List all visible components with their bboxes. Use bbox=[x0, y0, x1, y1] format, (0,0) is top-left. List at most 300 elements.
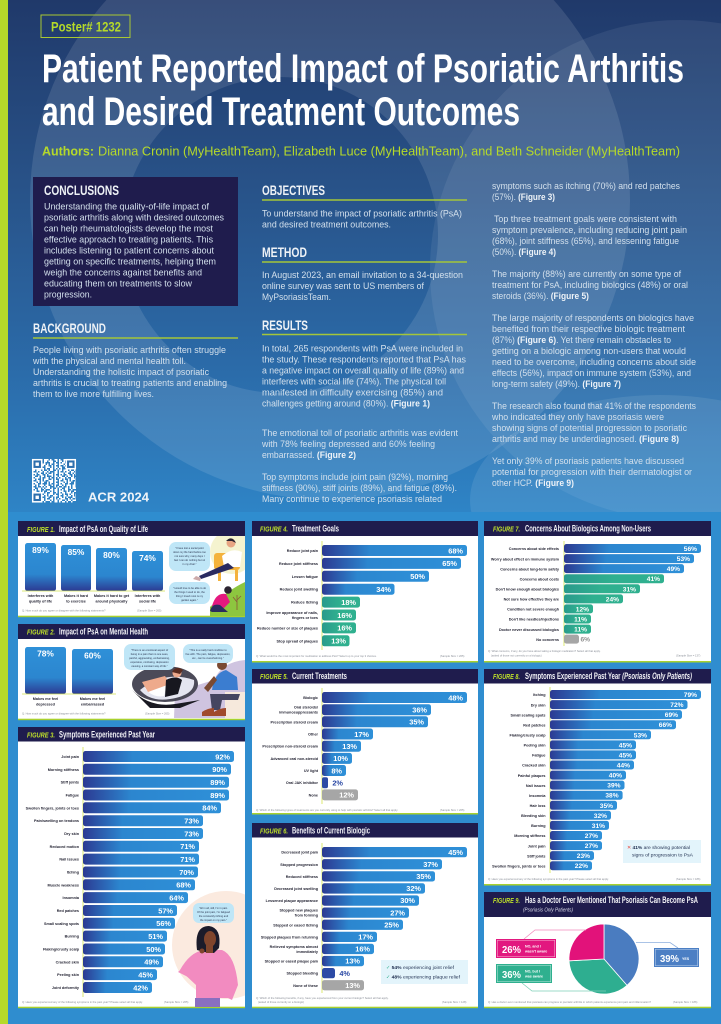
bar chart: psoriasis-only symptoms: Peeling skin bbox=[524, 744, 546, 748]
bar chart: biologic benefits: None of these bbox=[293, 984, 318, 988]
bar chart: symptoms past year: Dry skin bbox=[64, 832, 80, 836]
bar chart: psoriasis-only symptoms: 45% bbox=[619, 742, 632, 749]
bar chart: current treatments: 35% bbox=[409, 718, 424, 727]
footnote: Q: Has a doctor ever mentioned that psoriasis can progress to psoriatic arthritis in which patients experience joint pain and inflammation? bbox=[488, 1000, 651, 1004]
panel: figure 9: FIGURE 9. bbox=[493, 898, 520, 905]
bar chart: current treatments: 2% bbox=[332, 778, 343, 788]
panel: results, column two: treatment for PsA, including biologics (48%) or oral bbox=[492, 279, 688, 290]
bar chart: quality of life: around physically bbox=[96, 600, 128, 604]
footnote: (Sample Size = 186) bbox=[673, 1000, 698, 1004]
panel: results, column one: with 78% feeling depressed and 60% feeling bbox=[261, 438, 435, 449]
footnote: (Sample Size = 265) bbox=[440, 808, 465, 812]
bar chart: symptoms past year: Nail issues bbox=[59, 858, 79, 862]
bar chart: psoriasis-only symptoms: Insomnia bbox=[529, 794, 546, 798]
bar chart: psoriasis-only symptoms: 31% bbox=[592, 823, 605, 830]
footnote: (Sample Size = 265) bbox=[145, 712, 170, 716]
callout: patient quote two: "I would love to be able to do bbox=[173, 586, 207, 590]
callout: yes: 39% bbox=[660, 954, 679, 965]
bar chart: biologic benefits: 32% bbox=[406, 884, 421, 893]
bar chart: concerns about biologics: 56% bbox=[684, 546, 697, 553]
bar chart: biologic benefits: Stopped progression bbox=[280, 863, 319, 867]
callout: patient quote five bbox=[193, 903, 234, 923]
panel: background section: them to live more fulfilling lives. bbox=[33, 388, 154, 399]
bar chart: symptoms past year: 64% bbox=[169, 893, 184, 902]
bar chart: biologic benefits: 45% bbox=[448, 848, 463, 857]
callout: progression signs bbox=[623, 840, 701, 863]
callout: progression signs: ✕ 41% are showing potential bbox=[627, 845, 690, 851]
panel: results, column two: other HCP. (Figure 9) bbox=[492, 477, 574, 488]
panel: background section: BACKGROUND bbox=[33, 320, 106, 336]
panel: figure 1: FIGURE 1. bbox=[27, 527, 55, 534]
bar chart: treatment goals: Reduce joint pain bbox=[287, 549, 319, 553]
panel: figure 9: (Psoriasis Only Patients) bbox=[523, 908, 573, 914]
bar chart: psoriasis-only symptoms: Burning bbox=[531, 824, 546, 828]
panel: figure 9 bbox=[484, 892, 711, 1008]
panel: results, column one: Top symptoms include joint pain (92%), morning bbox=[262, 471, 448, 482]
bar chart: concerns about biologics: 24% bbox=[606, 596, 619, 603]
bar chart: treatment goals: Improve appearance of nails, bbox=[266, 611, 318, 615]
bar chart: psoriasis-only symptoms: 38% bbox=[605, 793, 619, 800]
bar chart: psoriasis-only symptoms: 45% bbox=[619, 752, 632, 759]
bar chart: psoriasis-only symptoms: Hair loss bbox=[530, 804, 546, 808]
bar chart: symptoms past year: Reduced motion bbox=[50, 845, 80, 849]
authors: Dianna Cronin (MyHealthTeam), Elizabeth Luce (MyHealthTeam), and Beth Schneider (MyHealthTeam) bbox=[98, 144, 680, 158]
callout: patient quote four: etc., can be overwhelming." bbox=[192, 656, 224, 660]
panel: figure 8 bbox=[484, 669, 711, 886]
panel: objectives: and desired treatment outcomes. bbox=[262, 219, 391, 230]
bar chart: quality of life: quality of life bbox=[29, 600, 52, 604]
footnote: Q: How much do you agree or disagree with the following statements? bbox=[22, 608, 106, 612]
bar chart: psoriasis-only symptoms: Dry skin bbox=[531, 703, 546, 707]
bar chart: biologic benefits: 25% bbox=[384, 920, 399, 929]
illustration: resting and gardening patients bbox=[193, 536, 245, 616]
panel: figure 8: Symptoms Experienced Past Year (Psoriasis Only Patients) bbox=[525, 671, 692, 681]
panel: figure 7: Concerns About Biologics Among Non-Users bbox=[525, 524, 651, 534]
bar chart: current treatments: 10% bbox=[333, 754, 348, 763]
bar chart: concerns about biologics: No concerns bbox=[536, 638, 559, 642]
bar chart: psoriasis-only symptoms: 53% bbox=[634, 732, 647, 739]
footnote bbox=[22, 1000, 189, 1004]
panel: figure 3 bbox=[18, 727, 245, 1008]
bar chart: psoriasis-only symptoms: Cracked skin bbox=[522, 764, 546, 768]
panel: results, column two: Top three treatment goals were consistent with bbox=[494, 213, 677, 224]
bar chart: symptoms past year: Pain/swelling on tendons bbox=[34, 819, 79, 823]
callout: patient quote four: live with. The pain, fatigue, depression, bbox=[186, 652, 231, 656]
bar chart: treatment goals: 34% bbox=[376, 585, 391, 594]
bar chart: biologic benefits: Decreased joint pain bbox=[281, 851, 319, 855]
bar chart: biologic benefits: 13% bbox=[345, 981, 360, 990]
bar chart: quality of life: Makes it hard bbox=[64, 594, 89, 598]
callout: no but was aware bbox=[496, 964, 606, 991]
bar chart: current treatments: 13% bbox=[342, 742, 357, 751]
bar chart: psoriasis-only symptoms: Small scaling spots bbox=[510, 713, 546, 717]
panel: conclusions: weigh the concerns against benefits and bbox=[43, 266, 202, 278]
bar chart: symptoms past year: Insomnia bbox=[63, 896, 80, 900]
callout: relief summary: ✓ 48% experiencing plaque relief bbox=[386, 974, 461, 980]
bar chart: psoriasis-only symptoms: Joint pain bbox=[528, 844, 546, 848]
bar chart: symptoms past year: 51% bbox=[148, 932, 163, 941]
bar chart: concerns about biologics: 49% bbox=[667, 566, 680, 573]
panel: conclusions bbox=[33, 177, 238, 306]
callout: patient quote one: in my chair." bbox=[182, 562, 197, 566]
bar chart: current treatments: Prescription steroid cream bbox=[270, 720, 319, 724]
bar chart: psoriasis-only symptoms: 69% bbox=[665, 712, 678, 719]
bar chart: symptoms past year: 90% bbox=[212, 765, 227, 774]
bar chart: biologic benefits: Decreased joint swelling bbox=[274, 887, 319, 891]
panel: figure 1: Impact of PsA on Quality of Life bbox=[59, 524, 148, 534]
bar chart: symptoms past year: 42% bbox=[133, 983, 148, 992]
panel: method: online survey was sent to US members of bbox=[262, 280, 424, 291]
callout: patient quote five: the impact on my pain." bbox=[200, 918, 227, 922]
bar chart: biologic benefits: 16% bbox=[355, 945, 370, 954]
callout: patient quote five: "All in all, still, I'm in pain. bbox=[199, 906, 228, 910]
panel: conclusions: getting on specific treatments, helping them bbox=[44, 256, 216, 266]
bar chart: symptoms past year: 57% bbox=[158, 906, 173, 915]
bar chart: quality of life: Makes it hard to get bbox=[94, 594, 130, 598]
panel: objectives bbox=[262, 182, 467, 230]
bar chart: quality of life: Interferes with bbox=[135, 594, 161, 598]
panel: figure 3: FIGURE 3. bbox=[27, 732, 55, 740]
panel: results, column two: benefited from their respective biologic treatment bbox=[492, 323, 685, 334]
conference label: ACR 2024 bbox=[88, 490, 150, 505]
bar chart: concerns about biologics: Condition not severe enough bbox=[507, 608, 560, 612]
bar chart: quality of life: 89% bbox=[32, 545, 49, 555]
panel: results, column two: (57%). (Figure 3) bbox=[492, 191, 555, 202]
panel: results, column one: The emotional toll of psoriatic arthritis was evident bbox=[262, 427, 458, 438]
bar chart: current treatments: Oral steroids/ bbox=[294, 706, 318, 710]
bar chart: current treatments bbox=[262, 688, 467, 804]
bar chart: symptoms past year: Flaking/crusty scalp bbox=[43, 948, 80, 952]
bar chart: concerns about biologics: 6% bbox=[580, 637, 590, 644]
bar chart: symptoms past year: 92% bbox=[215, 752, 230, 761]
panel: method: In August 2023, an email invitation to a 34-question bbox=[262, 269, 463, 280]
bar chart: psoriasis-only symptoms: Nail issues bbox=[526, 784, 546, 788]
bar chart: concerns about biologics: Don't know enough about biologics bbox=[496, 588, 559, 592]
bar chart: mental health: 78% bbox=[37, 648, 54, 658]
bar chart: treatment goals: Reduce number or size of plaques bbox=[257, 626, 318, 630]
panel: conclusions: Understanding the quality-of-life impact of bbox=[44, 200, 209, 212]
bar chart: concerns about biologics: Doctor never discussed biologics bbox=[499, 628, 559, 632]
bar chart: psoriasis-only symptoms: 22% bbox=[575, 863, 588, 870]
bar chart: psoriasis-only symptoms: Red patches bbox=[523, 723, 546, 727]
bar chart: psoriasis-only symptoms: Morning stiffness bbox=[514, 834, 546, 838]
bar chart: symptoms past year: 56% bbox=[156, 919, 171, 928]
bar chart: biologic benefits: Relieved symptoms almost bbox=[270, 945, 319, 949]
callout: no but was aware: NO, but I bbox=[525, 970, 540, 974]
bar chart: concerns about biologics: Concerns about costs bbox=[520, 577, 559, 581]
bar chart: biologic benefits: 27% bbox=[390, 908, 405, 917]
bar chart: concerns about biologics: 11% bbox=[574, 616, 587, 624]
footnote: (asked of those not currently on a biologic) bbox=[491, 654, 542, 658]
bar chart: biologic benefits: 17% bbox=[358, 932, 373, 942]
bar chart: concerns about biologics: 41% bbox=[647, 576, 660, 583]
bar chart: biologic benefits: from forming bbox=[295, 914, 319, 918]
bar chart: symptoms past year: 89% bbox=[210, 791, 225, 800]
bar chart: treatment goals: 16% bbox=[337, 624, 352, 633]
bar chart: current treatments: Oral JAK inhibitor bbox=[286, 781, 319, 785]
bar chart: psoriasis-only symptoms bbox=[492, 687, 701, 873]
bar chart: concerns about biologics: Not sure how effective they are bbox=[504, 598, 559, 602]
footnote: (asked of those currently on a biologic) bbox=[258, 1000, 304, 1004]
bar chart: symptoms past year: 89% bbox=[210, 778, 225, 787]
bar chart: psoriasis-only symptoms: Fatigue bbox=[532, 754, 546, 758]
bar chart: biologic benefits: Stopped bleeding bbox=[287, 972, 319, 976]
bar chart: concerns about biologics: Concerns about side effects bbox=[509, 547, 559, 551]
callout: relief summary: ✓ 54% experiencing joint relief bbox=[386, 965, 455, 971]
panel: background section bbox=[32, 320, 238, 399]
callout: patient quote one: down my life hard before too bbox=[173, 550, 206, 554]
bar chart: psoriasis-only symptoms: 40% bbox=[609, 773, 622, 780]
footnote bbox=[256, 808, 465, 812]
footnote: Q: How much do you agree or disagree with the following statements? bbox=[22, 712, 106, 716]
bar chart: symptoms past year: Swollen fingers, joints or toes bbox=[26, 806, 79, 810]
bar chart: psoriasis-only symptoms: Bleeding skin bbox=[521, 814, 546, 818]
bar chart: concerns about biologics: 53% bbox=[677, 556, 690, 563]
poster number badge: Poster# 1232 bbox=[51, 19, 121, 35]
panel: results, column two: arthritis and may be underdiagnosed. (Figure 8) bbox=[492, 433, 679, 444]
panel: results, column two: getting on a biologic among non-users that would bbox=[492, 345, 686, 356]
panel: results, column one: manifested in difficulty exercising (85%) and bbox=[262, 386, 443, 398]
bar chart: biologic benefits: Stopped or eased plaque pain bbox=[265, 960, 319, 964]
panel: figure 5 bbox=[252, 669, 478, 814]
panel: results, column two: The majority (88%) are currently on some type of bbox=[492, 268, 681, 279]
bar chart: quality of life: Interferes with bbox=[28, 594, 54, 598]
bar chart: psoriasis-only symptoms: 79% bbox=[684, 692, 697, 699]
footnote: (Sample Size = 265) bbox=[440, 654, 465, 658]
bar chart: current treatments: Biologic bbox=[303, 696, 318, 700]
bar chart: psoriasis-only symptoms: 27% bbox=[585, 843, 598, 850]
title: and Desired Treatment Outcomes bbox=[42, 90, 520, 134]
panel: results, column one: the study. These respondents reported that PsA has bbox=[262, 354, 466, 364]
panel: conclusions: psoriatic arthritis along with desired outcomes bbox=[44, 212, 224, 222]
footnote: (Sample Size = 265) bbox=[164, 1000, 189, 1004]
panel: results, column one: challenges getting around (80%). (Figure 1) bbox=[262, 398, 430, 408]
bar chart: current treatments: Advanced oral non-steroid bbox=[270, 757, 319, 761]
footnote: Q: Have you experienced any of the following symptoms in the past year? Please select all that apply. bbox=[488, 877, 609, 881]
bar chart: symptoms past year: Muscle weakness bbox=[48, 883, 79, 887]
callout: patient quote four: "This is a really hard condition to bbox=[189, 648, 227, 652]
panel: method bbox=[262, 244, 467, 302]
bar chart: current treatments: 8% bbox=[331, 766, 342, 775]
footnote: (Sample Size = 186) bbox=[676, 877, 701, 881]
bar chart: treatment goals: 16% bbox=[337, 611, 352, 620]
bar chart: symptoms past year: 73% bbox=[184, 829, 199, 838]
icon: QR code bbox=[32, 460, 76, 502]
bar chart: concerns about biologics: Concerns about long-term safety bbox=[500, 567, 560, 571]
callout: yes: YES bbox=[682, 957, 690, 961]
bar chart: biologic benefits: 4% bbox=[339, 969, 350, 978]
bar chart: symptoms past year bbox=[26, 747, 234, 997]
bar chart: biologic benefits: Stopped new plaques bbox=[279, 908, 318, 912]
bar chart: treatment goals: 68% bbox=[448, 546, 463, 555]
callout: patient quote one: "I have lost a social point bbox=[175, 546, 204, 550]
bar chart: treatment goals: Reduce itching bbox=[291, 601, 319, 605]
bar chart: quality of life: 74% bbox=[139, 553, 156, 563]
poster number badge bbox=[41, 15, 130, 38]
callout: no but was aware: was aware bbox=[524, 974, 543, 978]
callout: no and wasn't aware: wasn't aware bbox=[524, 950, 547, 954]
bar chart: psoriasis-only symptoms: 72% bbox=[670, 702, 684, 709]
bar chart: biologic benefits bbox=[261, 843, 467, 993]
footnote: Q: Which of the following types of treatments are you currently using to help with psoriatic arthritis? Select all that apply. bbox=[256, 808, 398, 812]
panel: results, column two: (68%), joint stiffness (65%), and lessening fatigue bbox=[492, 235, 679, 246]
bar chart: biologic benefits: 37% bbox=[423, 860, 438, 869]
callout: no and wasn't aware: 26% bbox=[502, 945, 521, 956]
bar chart: mental health bbox=[22, 647, 116, 706]
panel: figure 1 bbox=[18, 521, 254, 617]
panel: results, column one: RESULTS bbox=[262, 317, 308, 333]
bar chart: symptoms past year: 73% bbox=[184, 816, 199, 826]
bar chart: symptoms past year: Joint deformity bbox=[52, 986, 80, 990]
footnote: Q: Have you experienced any of the following symptoms in the past year? Please select all that apply. bbox=[22, 1000, 143, 1004]
title bbox=[42, 47, 684, 134]
panel: figure 2 bbox=[18, 624, 245, 720]
footnote bbox=[22, 712, 170, 716]
panel: conclusions: effective approach to treating patients. This bbox=[44, 234, 213, 244]
footnote bbox=[488, 1000, 698, 1004]
footnote bbox=[488, 877, 701, 881]
bar chart: psoriasis-only symptoms: Itching bbox=[533, 693, 546, 697]
bar chart: mental health: embarrassed bbox=[81, 702, 105, 706]
bar chart: quality of life: social life bbox=[139, 600, 156, 604]
bar chart: psoriasis-only symptoms: Stiff joints bbox=[527, 854, 546, 858]
bar chart: psoriasis-only symptoms: 27% bbox=[585, 833, 598, 840]
panel: figure 5: Current Treatments bbox=[292, 671, 347, 681]
bar chart: treatment goals: 50% bbox=[410, 572, 425, 581]
panel: results, column two bbox=[491, 180, 696, 488]
bar chart: biologic benefits: 30% bbox=[400, 896, 415, 905]
bar chart: current treatments: UV light bbox=[304, 769, 319, 773]
callout: progression signs: signs of progression to PsA bbox=[632, 852, 694, 858]
bar chart: treatment goals bbox=[257, 541, 467, 650]
callout: patient quote one bbox=[169, 542, 210, 571]
panel: results, column two: need to be overcome, including concerns about side bbox=[492, 356, 696, 367]
bar chart: psoriasis-only symptoms: 35% bbox=[600, 803, 613, 810]
bar chart: symptoms past year: Morning stiffness bbox=[48, 768, 79, 772]
footnote: (Sample Size = 137) bbox=[676, 654, 701, 658]
bar chart: concerns about biologics bbox=[491, 541, 701, 646]
panel: figure 8: FIGURE 8. bbox=[493, 674, 520, 681]
panel: results, column two: potential for progression with their dermatologist or bbox=[492, 466, 692, 477]
bar chart: concerns about biologics: 12% bbox=[576, 606, 589, 613]
bar chart: symptoms past year: Small scaling spots bbox=[44, 922, 79, 926]
panel: figure 6: Benefits of Current Biologic bbox=[292, 826, 370, 836]
bar chart: quality of life: to exercise bbox=[66, 600, 86, 604]
panel: figure 7: FIGURE 7. bbox=[493, 526, 520, 534]
panel: objectives: To understand the impact of psoriatic arthritis (PsA) bbox=[262, 208, 462, 219]
panel: objectives: OBJECTIVES bbox=[262, 182, 325, 198]
bar chart: treatment goals: Reduce joint stiffness bbox=[279, 562, 318, 566]
bar chart: biologic benefits: Stopped or eased itching bbox=[273, 923, 319, 927]
bar chart: current treatments: 12% bbox=[339, 791, 354, 800]
bar chart: symptoms past year: 49% bbox=[144, 958, 159, 967]
panel: figure 2: Impact of PsA on Mental Health bbox=[59, 626, 148, 636]
callout: patient quote five: Of the joint pain, I'm fatigued bbox=[197, 910, 231, 914]
panel: conclusions: can help rheumatologists develop the most bbox=[44, 222, 213, 234]
panel: background section: Understanding the holistic impact of psoriatic bbox=[33, 366, 209, 377]
authors: Authors: bbox=[42, 144, 94, 158]
bar chart: biologic benefits: Reduced stiffness bbox=[286, 875, 318, 879]
panel: results, column two: (87%) (Figure 6). Yet there remain obstacles to bbox=[492, 334, 671, 345]
bar chart: psoriasis-only symptoms: 66% bbox=[659, 722, 672, 729]
callout: patient quote one: not sure why, many days I bbox=[175, 554, 205, 558]
callout: patient quote three: expensive, confusing, depression bbox=[130, 660, 169, 664]
callout: patient quote two bbox=[169, 582, 210, 604]
panel: results, column one: a negative impact on overall quality of life (89%) and bbox=[262, 364, 464, 376]
callout: patient quote three: being in a pain that no one sees, bbox=[131, 652, 169, 656]
panel: figure 3: Symptoms Experienced Past Year bbox=[59, 730, 155, 740]
bar chart: symptoms past year: 45% bbox=[138, 970, 153, 979]
bar chart: biologic benefits: 35% bbox=[416, 872, 431, 881]
bar chart: treatment goals: fingers or toes bbox=[292, 616, 318, 620]
bar chart: symptoms past year: Stiff joints bbox=[61, 781, 79, 785]
bar chart: current treatments: immunosuppressants bbox=[279, 711, 318, 715]
panel: figure 4: Treatment Goals bbox=[292, 524, 339, 534]
footnote: (Sample Size = 128) bbox=[442, 1000, 467, 1004]
bar chart: psoriasis-only symptoms: Swollen fingers, joints or toes bbox=[492, 864, 546, 868]
bar chart: current treatments: 36% bbox=[412, 706, 427, 714]
footnote: Q: What concerns, if any, do you have about taking a biologic medication? Select all that apply. bbox=[488, 649, 601, 653]
bar chart: symptoms past year: 70% bbox=[179, 868, 194, 877]
footnote: (Sample Size = 265) bbox=[137, 608, 162, 612]
panel: results, column two: who indicated they only have psoriasis were bbox=[491, 411, 664, 422]
bar chart: quality of life bbox=[22, 543, 165, 604]
bar chart: concerns about biologics: 31% bbox=[623, 586, 636, 593]
panel: results, column one: In total, 265 respondents with PsA were included in bbox=[262, 343, 463, 354]
bar chart: concerns about biologics: Worry about effect on immune system bbox=[491, 557, 560, 561]
bar chart: psoriasis-only symptoms: 39% bbox=[607, 783, 621, 790]
bar chart: symptoms past year: Burning bbox=[65, 935, 80, 939]
panel: results, column one: embarrassed. (Figure 2) bbox=[262, 449, 356, 460]
panel: method: METHOD bbox=[262, 244, 307, 260]
footnote: Q: Which of the following benefits, if any, have you experienced from your current biologic? Select all that apply. bbox=[256, 996, 389, 1000]
panel: results, column two: effects (56%), impact on immune system (53%), and bbox=[492, 367, 691, 378]
callout: patient quote two: thing I loved most is my bbox=[176, 594, 204, 598]
bar chart: symptoms past year: Fatigue bbox=[66, 794, 79, 798]
bar chart: psoriasis-only symptoms: 32% bbox=[594, 813, 607, 820]
panel: background section: with the physical and mental health toll. bbox=[32, 355, 186, 366]
callout: patient quote three: causing, a constant way of life." bbox=[131, 664, 168, 668]
bar chart: symptoms past year: 84% bbox=[202, 804, 217, 813]
callout: patient quote two: garden again." bbox=[181, 598, 198, 602]
panel: figure 5: FIGURE 5. bbox=[260, 674, 288, 681]
panel: figure 6 bbox=[252, 823, 478, 1008]
bar chart: symptoms past year: 71% bbox=[180, 855, 195, 864]
callout: patient quote four bbox=[183, 644, 233, 663]
left accent strip bbox=[0, 0, 8, 1024]
bar chart: biologic benefits: Stopped plaques from returning bbox=[261, 935, 319, 939]
bar chart: treatment goals: 65% bbox=[442, 559, 457, 568]
bar chart: psoriasis-only symptoms: 23% bbox=[577, 853, 590, 860]
bar chart: symptoms past year: Peeling skin bbox=[57, 973, 80, 977]
bar chart: treatment goals: Stop spread of plaques bbox=[277, 639, 318, 643]
footnote: Q: What would be the most important for medication to address PsA? Select up to your top 3 choices. bbox=[256, 654, 377, 658]
bar chart: concerns about biologics: 11% bbox=[574, 627, 587, 634]
callout: patient quote one: feel I can do nothing but sit bbox=[174, 558, 205, 562]
bar chart: mental health: Makes me feel bbox=[33, 697, 58, 701]
panel: results, column two: steroids (36%). (Figure 5) bbox=[492, 290, 589, 301]
callout: yes bbox=[636, 942, 699, 967]
panel: conclusions: educating them on treatments to slow bbox=[44, 278, 192, 288]
callout: patient quote five: the constantly itching and bbox=[199, 914, 229, 918]
footnote bbox=[22, 608, 162, 612]
panel: conclusions: progression. bbox=[44, 288, 92, 300]
bar chart: treatment goals: Lessen fatigue bbox=[292, 575, 318, 579]
panel: results, column one bbox=[261, 317, 467, 504]
bar chart: symptoms past year: 71% bbox=[180, 842, 195, 851]
callout: patient quote three: "There is an emotional aspect of bbox=[131, 648, 168, 652]
panel: results, column two: symptom prevalence, including reducing joint pain bbox=[492, 224, 687, 235]
